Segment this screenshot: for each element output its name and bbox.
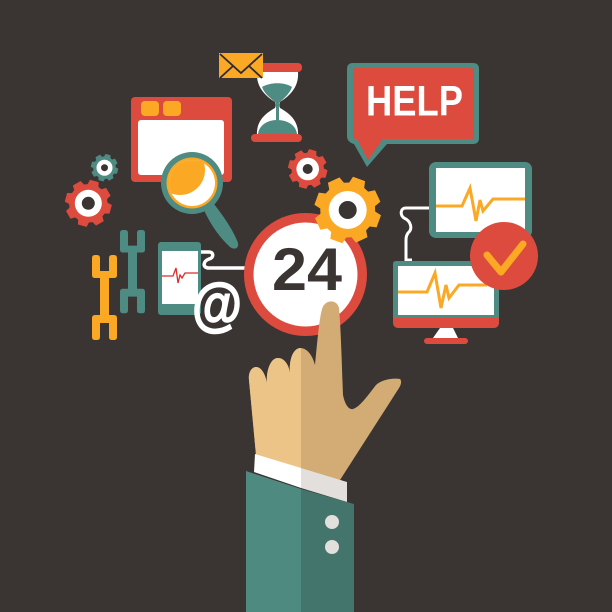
speech bubble: help bbox=[347, 63, 479, 167]
icon: envelope bbox=[219, 53, 263, 78]
lower monitor bbox=[393, 261, 499, 344]
icon: orange gear bbox=[305, 168, 390, 252]
infographic: 24 hour help support bbox=[64, 53, 538, 612]
icon: teal gear bbox=[88, 151, 121, 184]
connector: phone to 24 bbox=[200, 252, 246, 268]
palm light half bbox=[248, 348, 301, 468]
icon: teal wrench bbox=[120, 230, 145, 313]
icon: magnifying glass bbox=[161, 152, 238, 249]
button bbox=[325, 540, 339, 554]
24 label: 24 bbox=[272, 236, 343, 303]
icon: hourglass bbox=[251, 63, 302, 142]
connector: monitors bbox=[401, 208, 429, 260]
browser window bbox=[131, 97, 232, 182]
help label: HELP bbox=[366, 78, 463, 126]
phone bbox=[158, 242, 201, 315]
icon: large red gear bbox=[60, 175, 117, 232]
shirt cuff bbox=[254, 454, 347, 502]
sleeve bbox=[246, 471, 354, 612]
upper monitor bbox=[429, 162, 532, 238]
hand bbox=[249, 301, 401, 480]
finger and palm bbox=[249, 301, 401, 480]
24 clock badge bbox=[244, 213, 367, 336]
icon: small red gear bbox=[284, 145, 332, 193]
button bbox=[325, 515, 339, 529]
icon: check badge bbox=[470, 222, 538, 290]
at sign: @ bbox=[192, 272, 242, 337]
icon: orange wrench bbox=[92, 255, 117, 340]
